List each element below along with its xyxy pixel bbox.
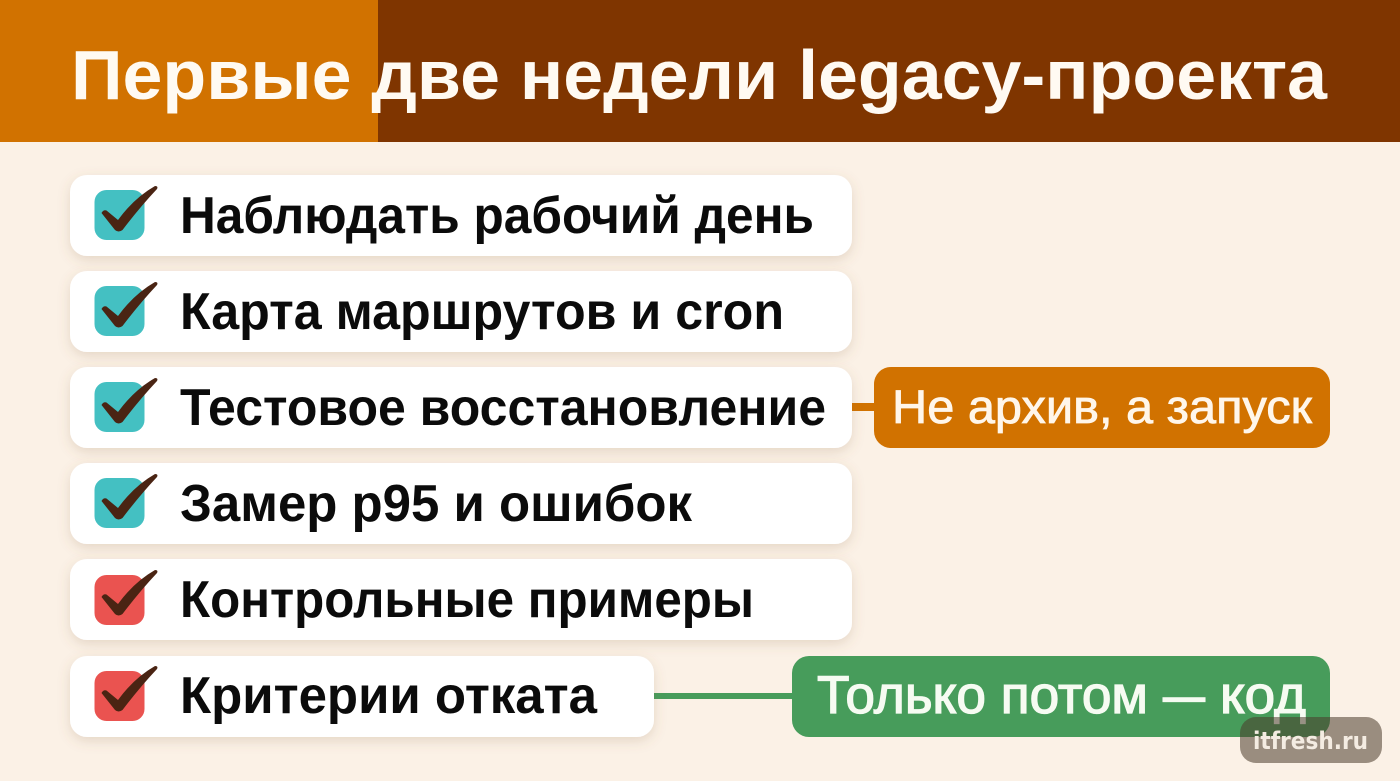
callout: green: код bbox=[1220, 666, 1306, 725]
checklist item 6 bbox=[70, 656, 654, 737]
checklist item 3: Тестовое восстановление bbox=[180, 379, 826, 437]
callout: orange bbox=[874, 367, 1330, 448]
checklist item 6: Критерии отката bbox=[180, 667, 598, 725]
watermark bbox=[1240, 717, 1382, 763]
callout: green bbox=[792, 656, 1330, 737]
checklist item 4 bbox=[70, 463, 852, 544]
watermark: itfresh.ru bbox=[1253, 727, 1368, 755]
header banner bbox=[0, 0, 1400, 142]
callout: green: — bbox=[1163, 666, 1205, 725]
callout: green: Только потом bbox=[817, 666, 1148, 725]
checklist item 3 bbox=[70, 367, 852, 448]
connector: restore to callout bbox=[852, 403, 876, 411]
checklist item 4: Замер p95 и ошибок bbox=[180, 475, 693, 533]
connector: rollback to callout bbox=[654, 693, 794, 699]
checklist item 5: Контрольные примеры bbox=[180, 571, 754, 629]
checklist item 2: Карта маршрутов и cron bbox=[180, 283, 784, 341]
callout: orange: Не архив, а запуск bbox=[892, 380, 1312, 433]
checklist item 1: Наблюдать рабочий день bbox=[180, 187, 814, 245]
checklist item 1 bbox=[70, 175, 852, 256]
checklist item 5 bbox=[70, 559, 852, 640]
checklist item 2 bbox=[70, 271, 852, 352]
title: Первые две недели legacy-проекта bbox=[71, 36, 1328, 114]
